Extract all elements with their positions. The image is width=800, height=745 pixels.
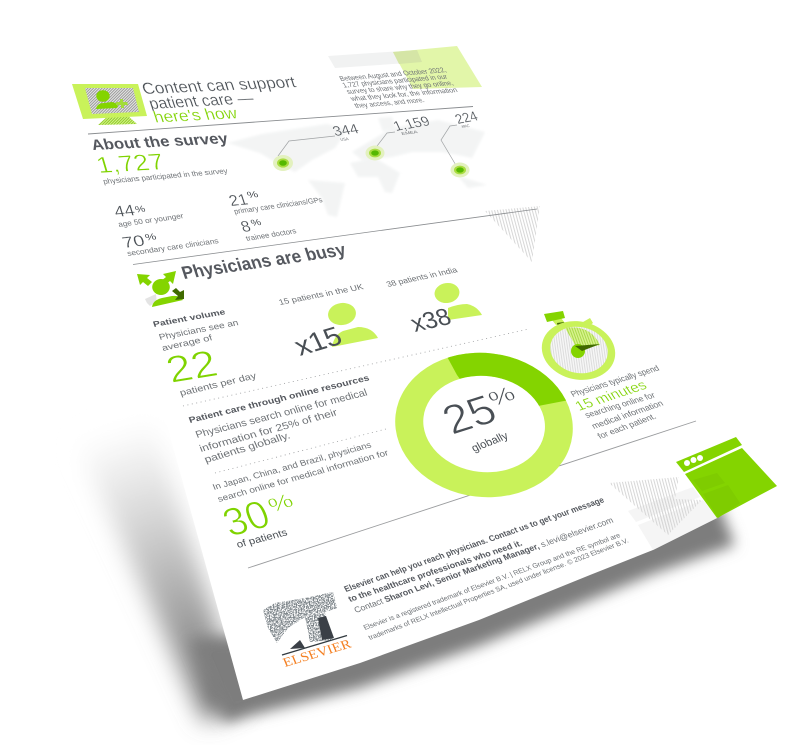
title: patient care — [147,89,257,113]
stat: 44 percent: 44 [112,202,137,221]
map marker: USA: USA [339,136,350,142]
intro text: Between August and October 2022, [338,65,448,83]
donut chart [395,352,573,498]
stat: 30 percent [216,490,297,551]
Japan China Brazil text: search online for medical information for [216,447,390,504]
map marker: USA: 344 [330,122,361,140]
footer call to action: to the healthcare professionals who need it. [346,538,524,604]
intro text: what they look for, the information [348,85,459,103]
intro text: 1,727 physicians participated in our [341,72,450,89]
icon: person with arrows [137,271,184,307]
online resources text: patients globally. [203,431,292,466]
footer call to action: Contact Sharon Levi, Senior Marketing Manager, s.levi@elsevier.com [352,515,615,615]
stat: 70 percent: secondary care clinicians [126,236,220,258]
stat: 8 percent [238,217,298,243]
stat: 44 percent [112,202,185,229]
stat: 21 percent: % [245,189,260,200]
online resources text: Physicians search online for medical [194,388,369,441]
map marker: EMEA [366,114,433,160]
donut chart: 25 [434,386,504,443]
footer legal text: Elsevier is a registered trademark of Elsevier B.V. | RELX Group and the RE symbol are [363,532,622,632]
online resources text: Patient care through online resources [187,373,371,425]
world map [228,117,487,217]
stat: 30 percent: of patients [235,528,289,551]
patient volume text: 22 [161,342,223,392]
Elsevier logo: ELSEVIER [280,636,354,670]
footer legal text: trademarks of RELX Intellectual Properties SA, used under license. © 2023 Elsevier B.V. [367,537,630,642]
stopwatch caption: searching online for [583,390,657,420]
donut chart: % [485,382,519,411]
decorative header blocks [328,46,482,89]
Japan China Brazil text: In Japan, China, and Brazil, physicians [211,440,373,492]
map marker: USA [273,122,361,171]
title: here's how [151,105,240,126]
stat: 8 percent: % [249,217,263,228]
stopwatch caption: Physicians typically spend [569,363,661,399]
UK patients figure: x15 [289,320,347,361]
stat: 8 percent: trainee doctors [244,226,298,243]
stat: 8 percent: 8 [238,218,254,236]
stat: 44 percent: % [134,204,147,214]
stat: total physicians: physicians participated in the survey [102,166,229,186]
stat: total physicians [93,149,229,186]
India patients figure [385,266,482,338]
map marker: APAC: 224 [453,109,481,128]
patient volume text [152,307,258,398]
icon: computer monitor with patient [72,84,147,125]
stopwatch caption: 15 minutes [572,378,650,414]
map marker: EMEA: 1,159 [391,114,433,135]
stat: 21 percent: primary care clinicians/GPs [232,195,324,216]
title [140,73,299,126]
online resources text: information for 25% of their [198,407,340,455]
decorative triangles and blocks [609,477,717,550]
donut chart: globally [470,430,511,455]
stat: 44 percent: age 50 or younger [117,211,185,229]
stat: 30 percent: % [265,490,297,518]
stat: 70 percent: 70 [120,233,147,252]
stat: 70 percent [120,231,220,258]
patient volume text: Physicians see an [157,317,240,342]
map marker: APAC [441,109,481,178]
UK patients figure: 15 patients in the UK [277,282,365,307]
hatch decoration [485,206,540,262]
title: Content can support [140,73,299,98]
stopwatch caption: medical information [589,398,665,431]
online resources text [187,373,371,466]
UK patients figure [277,282,378,361]
patient volume text: Patient volume [152,307,227,329]
stat: 21 percent: 21 [227,192,250,210]
footer call to action: Elsevier can help you reach physicians. Contact us to get your message [342,495,606,594]
intro text [338,65,459,110]
patient volume text: patients per day [178,370,258,398]
Elsevier logo [263,592,354,670]
stopwatch caption [569,363,665,441]
icon: stopwatch [536,311,621,387]
heading: physicians are busy: Physicians are busy [179,240,348,283]
page sheet [73,45,777,700]
stat: 70 percent: % [144,231,158,242]
Japan China Brazil text [211,440,390,504]
map marker: APAC: APAC [460,123,470,129]
patient volume text: average of [160,332,214,353]
intro text: survey to share why they go online, [345,78,455,96]
stopwatch caption: for each patient. [595,411,658,441]
icon: browser window [676,437,777,518]
map marker: EMEA: EMEA [400,129,419,136]
stat: 30 percent: 30 [216,492,276,545]
page shadow [78,408,735,722]
intro text: they access, and more. [353,96,426,110]
heading: about the survey: About the survey [89,130,231,154]
India patients figure: x38 [407,304,455,338]
stat: total physicians: 1,727 [93,149,167,178]
India patients figure: 38 patients in India [385,266,459,289]
